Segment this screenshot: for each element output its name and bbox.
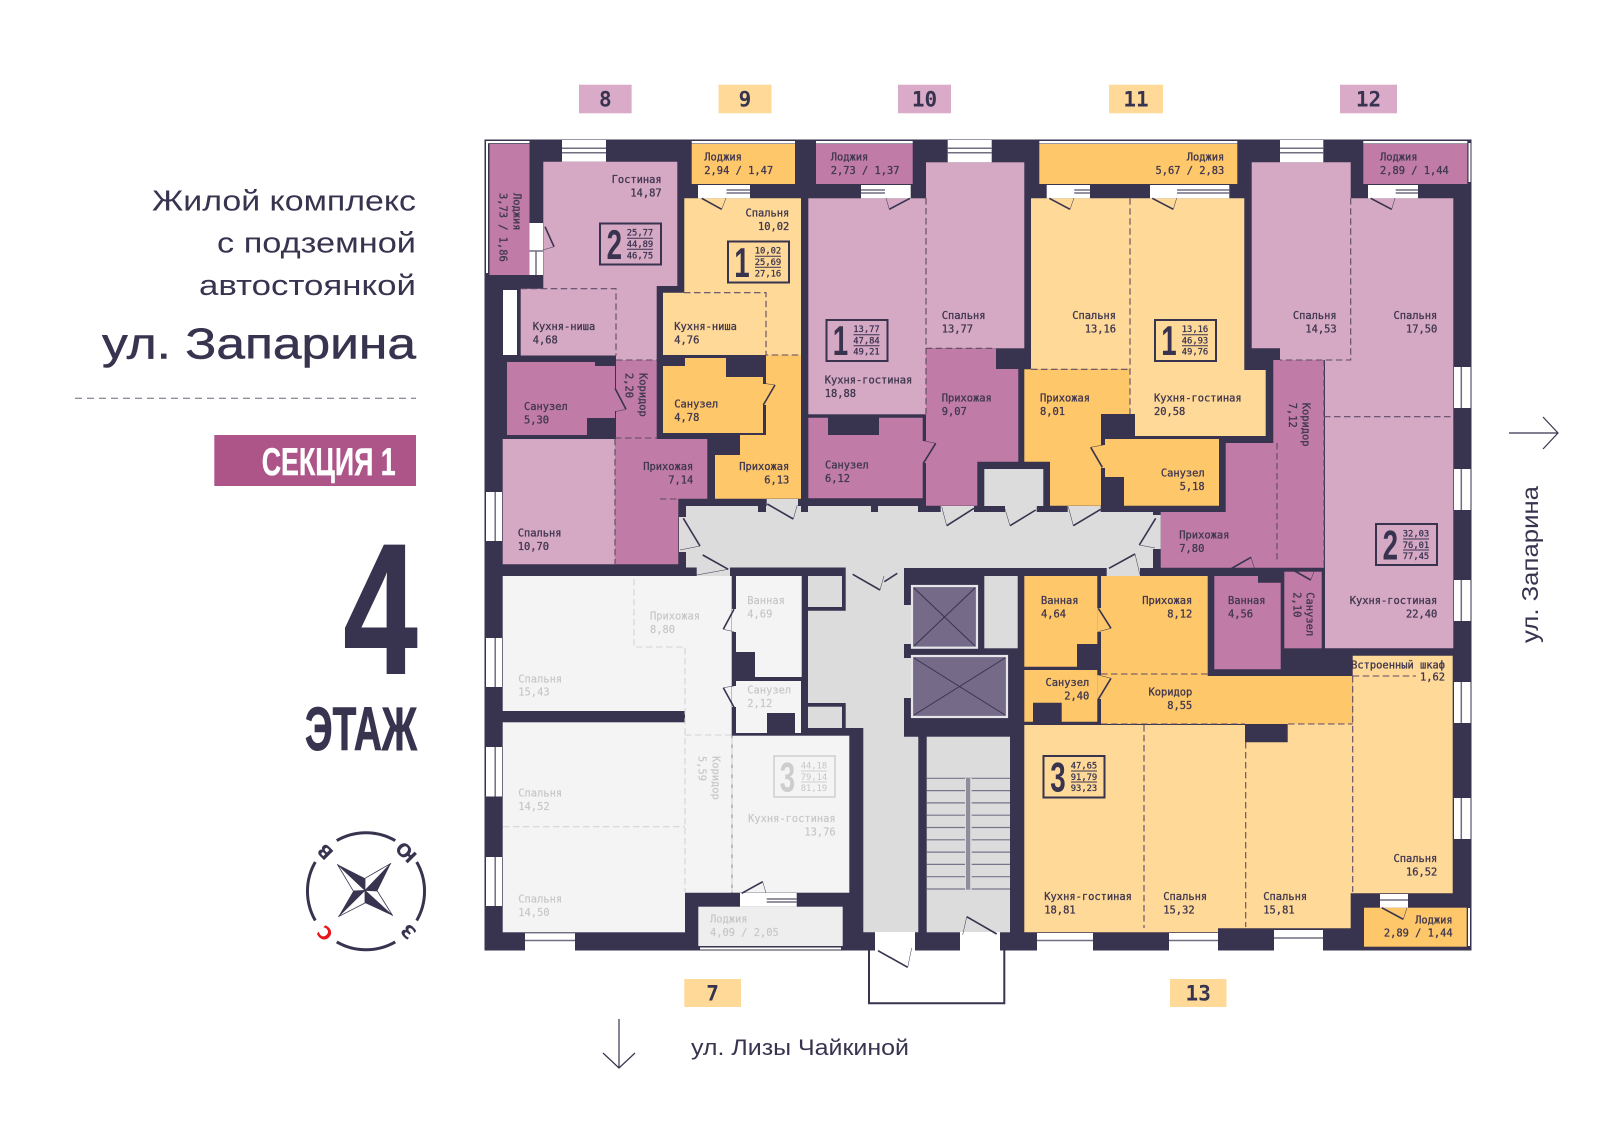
area badge: 1 room: 1 <box>833 317 848 365</box>
room label: loggia: Лоджия <box>704 152 742 164</box>
room label: bathroom: 2,12 <box>747 698 772 710</box>
room label: bath: 4,64 <box>1041 608 1066 620</box>
room label: kitchen-living <box>748 813 836 838</box>
area badge: 1 room: 46,93 <box>1182 337 1208 347</box>
room label: hallway: 8,12 <box>1167 608 1192 620</box>
icon: compass: Ю <box>392 837 422 866</box>
area badge: 2 rooms: 77,45 <box>1403 552 1429 562</box>
room label: bathroom: Санузел <box>747 684 791 696</box>
room label: bedroom 1: Спальня <box>518 673 562 685</box>
room label: bedroom 3: Спальня <box>1394 853 1437 865</box>
room label: bathroom: Санузел <box>1046 677 1089 689</box>
room label: loggia <box>831 152 900 177</box>
room label: hallway <box>1179 529 1229 555</box>
room label: loggia <box>710 914 779 939</box>
room label: bathroom: Санузел <box>1161 468 1205 480</box>
room label: corridor: 7,12 <box>1286 403 1298 428</box>
room label: bedroom 3 <box>1394 853 1437 878</box>
loggia label: Лоджия <box>510 193 522 231</box>
room label: loggia: 2,73 / 1,37 <box>831 165 900 177</box>
room label: kitchen-living: 13,76 <box>804 826 836 838</box>
room label: bedroom 2: 17,50 <box>1406 324 1437 336</box>
room label: bedroom: 10,70 <box>518 541 549 553</box>
room label: bathroom: 4,78 <box>674 412 699 424</box>
area badge: 2 rooms: 2 <box>1383 522 1398 569</box>
tag: apartment 7: 7 <box>706 982 719 1006</box>
room label: bathroom <box>1161 468 1205 493</box>
loggia label: 3,73 / 1,86 <box>496 193 508 262</box>
floor number: 4 <box>344 506 418 713</box>
room label: kitchen niche: Кухня-ниша <box>674 321 737 333</box>
room label: kitchen-living: 18,88 <box>825 388 856 400</box>
room label: bedroom 2: Спальня <box>1263 891 1307 903</box>
room label: corridor <box>1286 403 1312 446</box>
room label: corridor: Коридор <box>636 373 648 417</box>
room label: bathroom <box>1046 677 1089 703</box>
room label: bathroom <box>674 399 718 424</box>
apartment 13 <box>1024 576 1470 947</box>
room label: hallway <box>650 610 700 636</box>
tag: apartment 13: 13 <box>1186 982 1211 1006</box>
area badge: 1 room: 49,21 <box>853 348 880 358</box>
room label: kitchen niche: 4,76 <box>674 334 699 346</box>
area badge: 2 rooms: 2 <box>607 221 622 268</box>
room label: bedroom 2: 14,52 <box>518 801 550 813</box>
room label: corridor: Коридор <box>709 756 721 800</box>
room label: hallway: Прихожая <box>643 461 693 473</box>
room label: kitchen-living <box>1154 393 1242 418</box>
area badge: 1 room: 13,77 <box>853 325 880 335</box>
room label: bathroom <box>1290 592 1316 636</box>
area badge: 3 rooms: 44,18 <box>801 761 827 771</box>
area badge: 2 rooms <box>600 221 661 268</box>
area badge: 1 room: 10,02 <box>755 247 781 257</box>
stairwell <box>927 737 1010 932</box>
icon: compass: З <box>397 919 421 943</box>
room label: kitchen niche <box>533 321 595 346</box>
outer walls <box>484 140 1472 950</box>
arrow: east <box>1509 417 1558 449</box>
room label: kitchen niche: 4,68 <box>533 334 558 346</box>
tag: apartment 8: 8 <box>599 88 612 112</box>
tag: apartment 9 <box>718 85 772 113</box>
room label: built-in wardrobe <box>1351 659 1445 684</box>
room label: bedroom <box>746 208 789 233</box>
room label: bedroom 1: Спальня <box>1293 310 1337 322</box>
room label: kitchen-living <box>1350 595 1437 620</box>
tag: apartment 9: 9 <box>739 88 751 112</box>
area badge: 1 room <box>1155 317 1216 365</box>
room label: kitchen-living: 18,81 <box>1044 904 1076 916</box>
room label: bedroom: Спальня <box>942 310 985 322</box>
room label: bedroom <box>518 528 561 553</box>
room label: bath <box>1041 595 1079 620</box>
room label: bedroom: 13,77 <box>942 324 973 336</box>
room label: hallway: 6,13 <box>764 475 789 487</box>
room label: hallway: 8,80 <box>650 624 675 636</box>
porch outline <box>869 950 1004 1003</box>
room label: hallway: 9,07 <box>942 406 967 418</box>
room label: bath: 4,69 <box>747 608 772 620</box>
area badge: 1 room: 27,16 <box>755 269 781 279</box>
tag: apartment 11 <box>1109 85 1163 113</box>
room label: bathroom: Санузел <box>674 399 718 411</box>
room label: kitchen-living <box>1044 891 1132 916</box>
apartment 9 <box>663 144 801 499</box>
room label: bedroom: 13,16 <box>1085 324 1116 336</box>
room label: hallway: Прихожая <box>1179 529 1229 541</box>
room label: hallway <box>739 461 789 487</box>
tag: apartment 7 <box>684 979 741 1007</box>
room label: kitchen-living: 22,40 <box>1406 608 1437 620</box>
area badge: 3 rooms <box>774 754 835 801</box>
icon: compass: С <box>314 920 338 945</box>
room label: hallway: Прихожая <box>650 610 700 622</box>
room label: corridor: 2,20 <box>623 373 635 398</box>
apartment 11 <box>1024 144 1266 506</box>
area badge: 2 rooms: 76,01 <box>1403 541 1429 551</box>
heading: complex name: автостоянкой <box>199 270 416 302</box>
room label: hallway: Прихожая <box>942 393 992 405</box>
tag: apartment 11: 11 <box>1123 88 1149 112</box>
apartment 7 <box>503 576 849 950</box>
area badge: 1 room: 1 <box>1161 317 1177 365</box>
room label: bedroom <box>942 310 985 336</box>
area badge: 1 room: 1 <box>734 239 750 286</box>
area badge: 3 rooms: 47,65 <box>1071 761 1097 771</box>
room label: corridor: Коридор <box>1149 687 1192 699</box>
room label: bath <box>747 595 785 620</box>
room label: bedroom 2: Спальня <box>518 788 562 800</box>
room label: bathroom: Санузел <box>524 401 568 413</box>
room label: loggia: 4,09 / 2,05 <box>710 927 779 939</box>
apartment 8 <box>486 143 707 564</box>
area badge: 3 rooms: 81,19 <box>801 784 827 794</box>
area badge: 2 rooms <box>1376 522 1437 569</box>
tag: apartment 10 <box>898 85 951 113</box>
room label: corridor <box>623 373 648 417</box>
room label: bathroom: 5,18 <box>1180 481 1205 493</box>
room label: bath: Ванная <box>747 595 785 607</box>
tag: apartment 8 <box>579 85 632 113</box>
apartment 12 <box>1161 144 1467 669</box>
room label: bathroom: Санузел <box>825 459 869 471</box>
tag: apartment 12: 12 <box>1356 88 1381 112</box>
room label: hallway <box>1142 595 1192 620</box>
room label: bedroom 3: 16,52 <box>1406 866 1437 878</box>
room label: bathroom <box>747 684 791 710</box>
tag: apartment 10: 10 <box>912 88 937 112</box>
area badge: 1 room: 47,84 <box>853 337 880 347</box>
room label: kitchen-living: Кухня-гостиная <box>1044 891 1132 903</box>
room label: kitchen-living: 20,58 <box>1154 406 1185 418</box>
doors <box>543 198 1407 967</box>
area badge: 3 rooms: 3 <box>1050 754 1066 801</box>
area badge: 3 rooms: 3 <box>780 754 795 801</box>
room label: corridor: 8,55 <box>1167 700 1192 712</box>
windows <box>486 140 1470 951</box>
room label: bedroom: Спальня <box>1072 310 1116 322</box>
arrow: south <box>603 1019 635 1068</box>
area badge: 3 rooms: 93,23 <box>1071 784 1097 794</box>
icon: compass <box>307 833 425 950</box>
section badge <box>214 435 416 486</box>
heading: complex name: Жилой комплекс <box>152 186 416 218</box>
floor label: ЭТАЖ <box>305 695 418 763</box>
room label: bedroom: Спальня <box>518 528 561 540</box>
room label: hallway: 7,80 <box>1179 543 1204 555</box>
heading: complex name <box>152 186 416 302</box>
area badge: 3 rooms <box>1044 754 1104 801</box>
heading: complex name: с подземной <box>217 228 416 260</box>
room label: bedroom 1 <box>518 673 562 699</box>
room label: bedroom 1 <box>1293 310 1337 336</box>
room label: corridor: Коридор <box>1300 403 1312 446</box>
room label: kitchen niche: Кухня-ниша <box>533 321 595 333</box>
room label: loggia: Лоджия <box>831 152 868 164</box>
room label: bedroom 1: Спальня <box>1163 891 1207 903</box>
area badge: 1 room: 13,16 <box>1182 325 1208 335</box>
room label: corridor <box>695 756 721 800</box>
room label: loggia <box>1384 914 1453 940</box>
room label: loggia: Лоджия <box>1187 152 1224 164</box>
room label: hallway: 7,14 <box>668 475 693 487</box>
room label: bedroom 1: 15,43 <box>518 687 550 699</box>
lift 2 <box>912 656 1007 717</box>
street label: Лизы Чайкиной: ул. Лизы Чайкиной <box>691 1035 909 1060</box>
room label: bedroom: 10,02 <box>758 221 789 233</box>
room label: bedroom 1: 15,32 <box>1163 904 1195 916</box>
room label: loggia <box>1155 152 1224 177</box>
room label: built-in wardrobe: 1,62 <box>1420 672 1445 684</box>
room label: loggia: 2,89 / 1,44 <box>1384 928 1453 940</box>
room label: bedroom 2 <box>1394 310 1437 336</box>
room label: hallway: 8,01 <box>1040 406 1065 418</box>
street label: Запарина: ул. Запарина <box>1517 486 1543 643</box>
area badge: 3 rooms: 79,14 <box>801 773 827 783</box>
room label: kitchen niche <box>674 321 737 346</box>
room label: loggia: 5,67 / 2,83 <box>1155 165 1224 177</box>
room label: bedroom 3 <box>518 893 562 919</box>
room label: loggia: 2,94 / 1,47 <box>704 165 773 177</box>
area badge: 1 room <box>826 317 888 365</box>
room label: bathroom: 6,12 <box>825 473 850 485</box>
room label: bath: Ванная <box>1041 595 1079 607</box>
area badge: 2 rooms: 25,77 <box>627 229 653 239</box>
room label: kitchen-living: Кухня-гостиная <box>1154 393 1242 405</box>
room label: bathroom: 2,40 <box>1064 691 1089 703</box>
room label: bath: 4,56 <box>1228 608 1253 620</box>
loggia label <box>496 193 522 262</box>
room label: loggia: Лоджия <box>1415 914 1453 926</box>
common area: corridors, stairs, lifts <box>686 469 1153 951</box>
room label: bath <box>1228 595 1266 620</box>
area badge: 2 rooms: 46,75 <box>627 251 653 261</box>
floor plan <box>484 140 1472 1003</box>
section badge: СЕКЦИЯ 1 <box>262 441 396 484</box>
icon: compass: В <box>313 839 338 863</box>
room label: corridor <box>1149 687 1192 712</box>
room label: loggia: 2,89 / 1,44 <box>1380 165 1449 177</box>
area badge: 1 room: 49,76 <box>1182 348 1208 358</box>
area badge: 2 rooms: 32,03 <box>1403 529 1429 539</box>
room label: hallway <box>643 461 693 487</box>
room label: bedroom <box>1072 310 1116 336</box>
room label: loggia: Лоджия <box>710 914 748 926</box>
room label: kitchen-living: Кухня-гостиная <box>825 374 912 386</box>
room label: living room: 14,87 <box>630 188 662 200</box>
room label: corridor: 5,59 <box>695 756 707 781</box>
room label: kitchen-living: Кухня-гостиная <box>748 813 836 825</box>
room label: hallway: Прихожая <box>739 461 789 473</box>
room label: hallway: Прихожая <box>1040 393 1090 405</box>
room label: bedroom 3: Спальня <box>518 893 562 905</box>
room label: hallway <box>1040 393 1090 418</box>
tag: apartment 12 <box>1340 85 1397 113</box>
room label: bathroom <box>524 401 568 426</box>
room label: bedroom 2 <box>518 788 562 813</box>
room label: bedroom 2: Спальня <box>1394 310 1437 322</box>
room label: bathroom: 5,30 <box>524 414 549 426</box>
room label: hallway: Прихожая <box>1142 595 1192 607</box>
room label: living room: Гостиная <box>612 174 662 186</box>
room label: loggia <box>1380 152 1449 177</box>
room label: bedroom 2 <box>1263 891 1307 916</box>
room label: kitchen-living: Кухня-гостиная <box>1350 595 1437 607</box>
area badge: 1 room: 25,69 <box>755 258 781 268</box>
room label: bedroom 2: 15,81 <box>1263 904 1295 916</box>
lift 1 <box>912 586 977 648</box>
room label: bathroom <box>825 459 869 485</box>
room label: hallway <box>942 393 992 418</box>
area badge: 2 rooms: 44,89 <box>627 240 653 250</box>
room label: bathroom: 2,10 <box>1290 592 1302 617</box>
room label: bedroom 3: 14,50 <box>518 907 550 919</box>
tag: apartment 13 <box>1170 979 1226 1007</box>
heading: street: ул. Запарина <box>102 319 417 368</box>
room label: loggia: Лоджия <box>1380 152 1418 164</box>
room label: bedroom: Спальня <box>746 208 789 220</box>
room label: bathroom: Санузел <box>1304 592 1316 636</box>
room label: built-in wardrobe: Встроенный шкаф <box>1351 659 1445 671</box>
room label: bedroom 1 <box>1163 891 1207 916</box>
room label: bedroom 1: 14,53 <box>1305 324 1337 336</box>
room label: loggia <box>704 152 773 177</box>
room label: living room <box>612 174 662 200</box>
room label: bath: Ванная <box>1228 595 1266 607</box>
apartment 10 <box>808 144 1024 506</box>
area badge: 1 room <box>728 239 789 286</box>
room label: kitchen-living <box>825 374 912 400</box>
area badge: 3 rooms: 91,79 <box>1071 773 1097 783</box>
